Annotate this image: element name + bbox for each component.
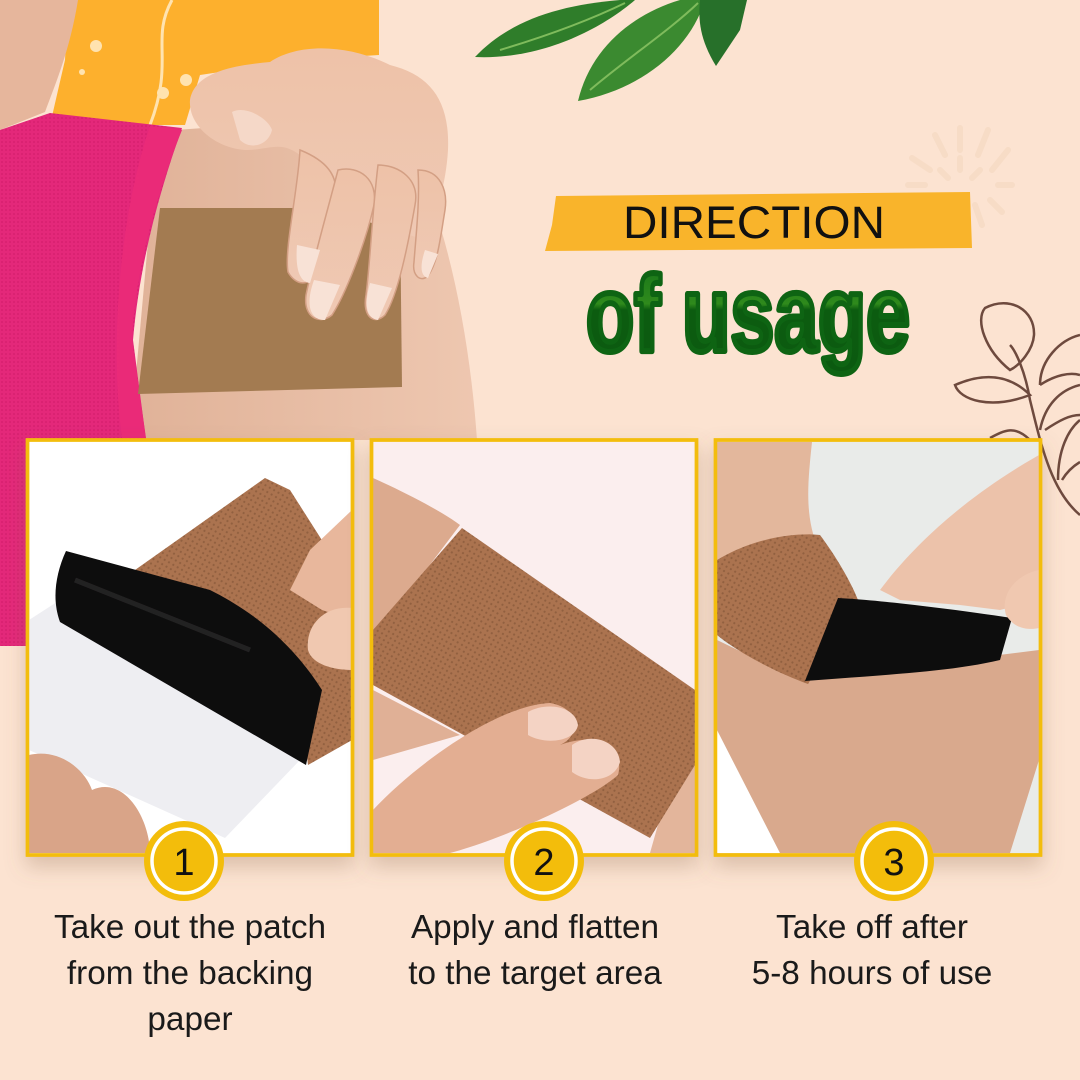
background white area: [717, 730, 780, 853]
step 3 text: 5-8 hours of use: [752, 955, 992, 992]
forearm: [717, 442, 815, 560]
step badge 3: [854, 821, 934, 901]
decorative leaves: [475, 0, 747, 101]
black peeled film: [55, 551, 322, 765]
arm: [373, 478, 460, 640]
step badge 1: [144, 821, 224, 901]
decorative line-art branch: [955, 303, 1080, 515]
heading: of usage: of usage: [586, 253, 910, 374]
step 2 text: Apply and flatten: [411, 909, 659, 946]
orange backdrop panel: [50, 0, 379, 125]
step badge 1: 1: [173, 842, 195, 884]
right fingers: [290, 510, 352, 620]
fingernails: [297, 245, 438, 320]
brown patch: [135, 478, 352, 765]
step 3 text: Take off after: [776, 909, 968, 946]
step 1 text: Take out the patch: [54, 909, 326, 946]
backing paper: [29, 600, 300, 838]
panel 2: [372, 440, 696, 855]
patch: [717, 534, 858, 684]
panel 1: [28, 440, 352, 855]
step badge 2: [504, 821, 584, 901]
step 1 text: from the backing: [67, 955, 313, 992]
neck and shoulder skin: [0, 0, 78, 130]
photo: arm with pink top and brown patch: [0, 0, 477, 646]
hand: [190, 48, 448, 319]
heading: DIRECTION banner: DIRECTION: [623, 197, 885, 248]
panel 3: [716, 440, 1040, 855]
pink top: [0, 113, 182, 646]
step 2 text: to the target area: [408, 955, 662, 992]
black film: [805, 598, 1012, 681]
heading: DIRECTION banner: [545, 192, 972, 251]
step badge 2: 2: [533, 842, 555, 884]
upper arm: [130, 122, 477, 440]
fingers: [373, 703, 619, 853]
hand: [880, 455, 1039, 610]
brown patch: [138, 208, 402, 394]
patch on arm: [373, 528, 695, 838]
decorative sunburst: [908, 128, 1012, 225]
bottom left thumb: [29, 754, 150, 853]
step badge 3: 3: [883, 842, 905, 884]
step 1 text: paper: [147, 1001, 233, 1038]
